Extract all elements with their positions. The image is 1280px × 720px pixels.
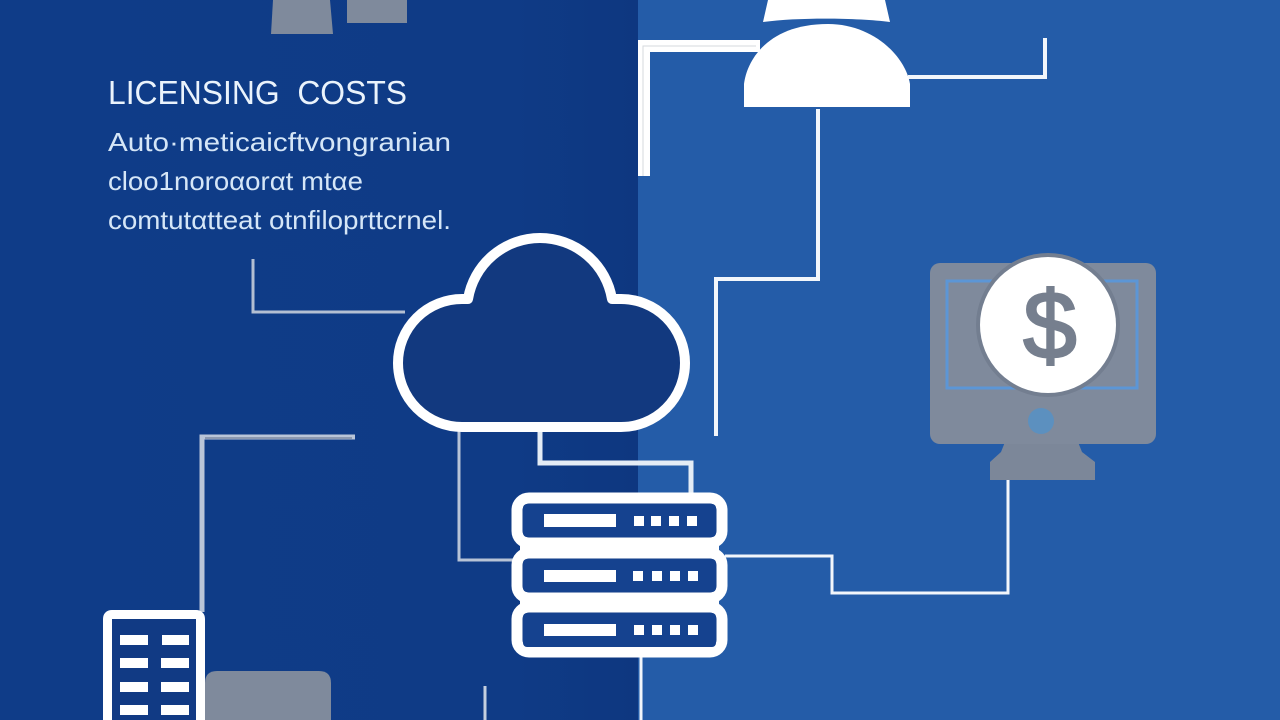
text block: description: cloo1noroαorαt mtαe — [108, 166, 363, 196]
monitor body — [930, 263, 1156, 444]
icon: server stack — [517, 498, 722, 652]
icon: grey shapes at top left — [271, 0, 407, 34]
text block: description: comtutαtteat otnfiloprttcrnel. — [108, 205, 451, 235]
title: LICENSING COSTS — [108, 74, 407, 111]
monitor stand — [990, 442, 1095, 480]
coin — [980, 257, 1116, 393]
connector: cloud to server left — [459, 428, 516, 560]
monitor button — [1028, 408, 1054, 434]
connector: bottom line left — [484, 686, 486, 720]
icon: monitor with dollar — [930, 253, 1156, 480]
text block: description — [108, 127, 451, 235]
text block: description: Auto·meticaicftvongranian — [108, 127, 451, 157]
connector: building to top left — [202, 437, 355, 612]
icon: building — [108, 614, 200, 720]
connector: cloud to server top — [540, 428, 691, 497]
dollar sign: $ — [1023, 272, 1077, 379]
panel: left dark background — [0, 0, 638, 720]
connector: dome down — [716, 109, 818, 436]
connector: server to monitor — [725, 478, 1008, 593]
monitor screen — [947, 281, 1137, 388]
icon: cloud — [398, 238, 685, 427]
connector: dome to left bracket — [643, 46, 760, 176]
panel: right blue background — [638, 0, 1280, 720]
connector: text to cloud — [253, 259, 405, 312]
connector: bottom line right — [640, 655, 642, 720]
icon: grey box bottom left — [205, 671, 331, 720]
icon: dome and cap — [744, 0, 910, 107]
coin ring — [976, 253, 1120, 397]
connector: dome to right — [908, 38, 1045, 77]
